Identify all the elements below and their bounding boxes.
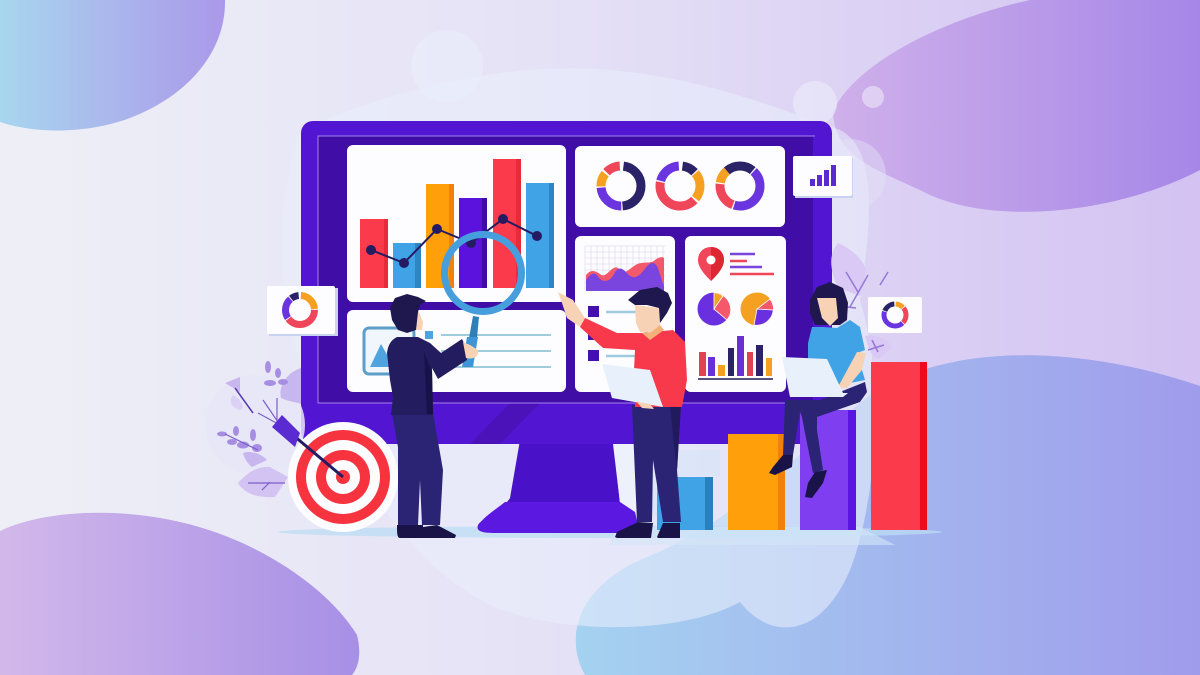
- panel: pin, pies and mini bars: [685, 236, 786, 392]
- magnifier: [444, 234, 522, 367]
- hand: [558, 292, 585, 327]
- plants behind target: [205, 243, 892, 497]
- person: woman on bar with laptop: [769, 282, 867, 498]
- trousers: [392, 413, 443, 525]
- blob: top left: [0, 0, 225, 130]
- pie 1: [698, 292, 731, 326]
- icon: target with arrow: [272, 415, 398, 532]
- ground band: [278, 526, 942, 545]
- person: analyst with magnifier: [387, 234, 522, 538]
- shoes: [769, 455, 827, 498]
- hair: [628, 287, 672, 323]
- shoes: [397, 525, 456, 538]
- arrow: [272, 415, 343, 477]
- panel: bar chart: [347, 145, 566, 302]
- line series: [366, 214, 542, 268]
- face: [413, 305, 423, 330]
- collar: [642, 325, 664, 340]
- grid: [585, 246, 665, 290]
- mini bar chart: [698, 336, 773, 379]
- donut 2: [660, 166, 700, 206]
- hand on laptop: [637, 402, 654, 409]
- area series: [586, 257, 664, 291]
- arm: [838, 352, 866, 388]
- list: [588, 306, 640, 361]
- card: donut right: [868, 297, 922, 333]
- blob: bottom right: [576, 355, 1200, 675]
- donut 1: [601, 166, 641, 206]
- laptop: [782, 357, 848, 397]
- decorative circles: [411, 30, 886, 211]
- panel: area chart and list: [575, 236, 675, 392]
- icon: map pin: [698, 247, 724, 281]
- face: [635, 305, 660, 333]
- panel: image and text lines: [347, 310, 566, 392]
- shirt and pointing arm: [580, 318, 687, 407]
- face and neck: [817, 298, 838, 326]
- hair: [810, 282, 848, 325]
- monitor: [301, 121, 832, 444]
- laptop: [602, 364, 663, 407]
- hair: [390, 294, 426, 333]
- legend lines: [730, 254, 774, 274]
- blob: top right: [833, 0, 1200, 212]
- donut 3: [720, 166, 760, 206]
- shoes: [615, 522, 680, 538]
- trousers: [632, 405, 681, 522]
- card: donut left: [267, 286, 338, 336]
- pie 2: [740, 292, 774, 326]
- legs: [783, 382, 867, 473]
- panel: donut charts: [575, 146, 785, 227]
- hand: [463, 342, 478, 359]
- blob: bottom left: [0, 513, 359, 675]
- card: bar icon: [793, 156, 853, 198]
- jacket: [387, 337, 467, 415]
- top: [808, 320, 865, 385]
- monitor stand: [478, 440, 720, 533]
- blob: central pale shape: [282, 68, 875, 627]
- bars: [360, 159, 554, 288]
- bars at right: [657, 362, 927, 530]
- person: presenter with laptop: [558, 287, 687, 538]
